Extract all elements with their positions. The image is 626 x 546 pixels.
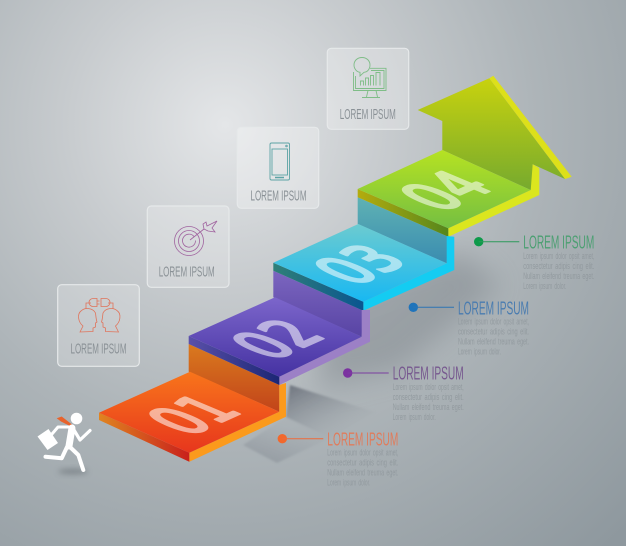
body: consectetur adipis cing elit. bbox=[458, 327, 529, 337]
body: Lorem ipsum dolor. bbox=[523, 281, 566, 291]
heading: LOREM IPSUM bbox=[393, 362, 464, 384]
number 03: 03 bbox=[296, 237, 425, 293]
body: Lorem ipsum dolor opsit amet, bbox=[327, 448, 398, 458]
runner shadow bbox=[58, 469, 88, 474]
briefcase bbox=[38, 429, 58, 450]
card: target icon bbox=[147, 206, 229, 287]
callout 4 bbox=[474, 231, 594, 291]
step 2 bbox=[189, 297, 370, 412]
callout 1 bbox=[278, 428, 398, 488]
floor shadow of the stairs bbox=[243, 385, 375, 463]
number 04: 04 bbox=[382, 163, 511, 219]
body and limbs bbox=[46, 427, 90, 470]
label: LOREM IPSUM bbox=[159, 263, 215, 280]
step 4 bbox=[358, 150, 539, 263]
body: Nullam eleifend treuma eget. bbox=[458, 337, 529, 347]
body: Lorem ipsum dolor. bbox=[458, 347, 501, 357]
body: consectetur adipis cing elit. bbox=[393, 392, 464, 402]
step 3 bbox=[273, 224, 454, 337]
runner figure bbox=[38, 413, 90, 474]
label: LOREM IPSUM bbox=[340, 106, 396, 123]
body: Lorem ipsum dolor. bbox=[393, 412, 436, 422]
callout 2 bbox=[343, 362, 464, 422]
body: Lorem ipsum dolor opsit amet, bbox=[458, 317, 529, 327]
head bbox=[71, 413, 82, 424]
icon: smartphone bbox=[270, 143, 290, 180]
card: phone icon bbox=[237, 127, 319, 208]
card: people icon bbox=[58, 285, 139, 366]
body bbox=[523, 251, 594, 291]
icon: target with dart bbox=[174, 221, 217, 256]
label: LOREM IPSUM bbox=[70, 341, 126, 358]
body: Nullam eleifend treuma eget. bbox=[393, 402, 464, 412]
card: chart icon bbox=[327, 48, 409, 129]
icon: monitor with chart and speech bubble bbox=[354, 58, 386, 98]
arrow head bbox=[418, 76, 572, 190]
label: LOREM IPSUM bbox=[250, 188, 306, 205]
tie bbox=[57, 416, 72, 426]
body bbox=[393, 382, 464, 422]
number 01: 01 bbox=[129, 387, 258, 443]
icon: two heads with plug bbox=[79, 298, 120, 332]
heading: LOREM IPSUM bbox=[327, 428, 398, 449]
body bbox=[458, 317, 529, 357]
body: Lorem ipsum dolor. bbox=[327, 478, 370, 488]
body: Lorem ipsum dolor opsit amet, bbox=[393, 382, 464, 392]
step 1 bbox=[99, 372, 286, 462]
body: consectetur adipis cing elit. bbox=[327, 458, 398, 468]
body: Nullam eleifend treuma eget. bbox=[327, 468, 398, 478]
callout 3 bbox=[409, 297, 529, 357]
body bbox=[327, 448, 398, 488]
number 02: 02 bbox=[213, 312, 342, 367]
heading: LOREM IPSUM bbox=[458, 297, 529, 318]
